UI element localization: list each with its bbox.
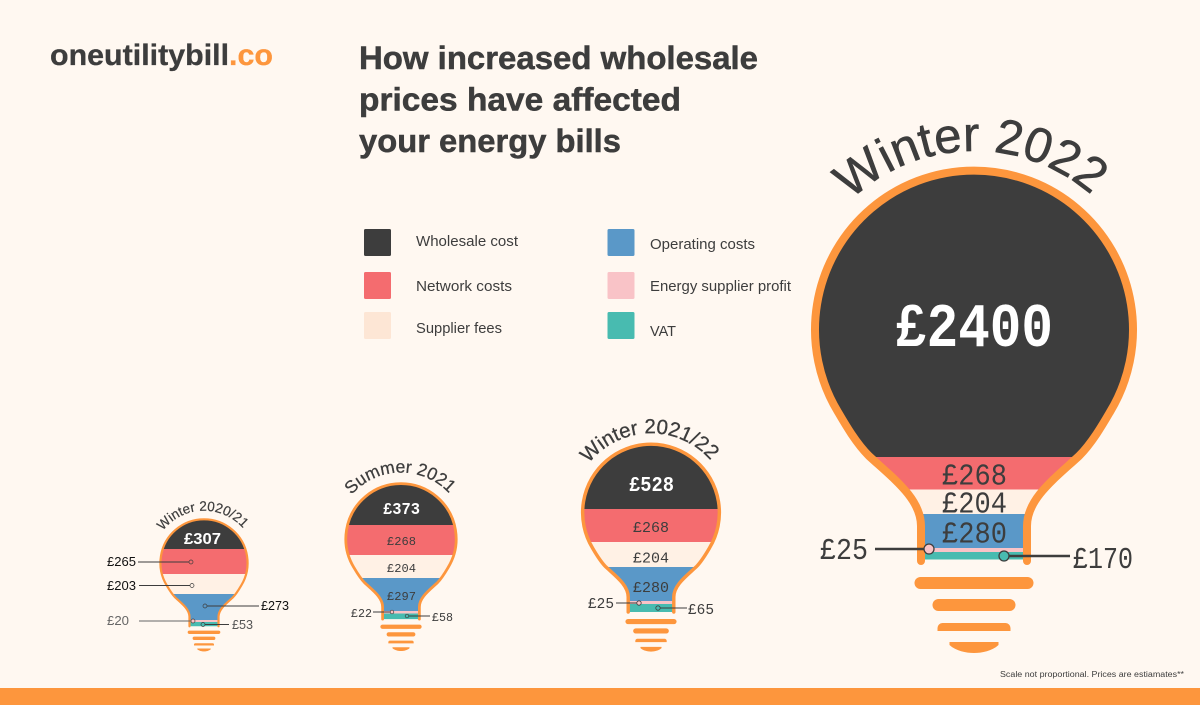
bulb: Winter 2022 — [811, 120, 1137, 653]
bulb segments — [584, 446, 718, 612]
network value: £268 — [387, 535, 416, 549]
legend: operating costs: Operating costs — [650, 237, 755, 253]
operating costs callout — [203, 599, 289, 613]
bulb outline and base — [160, 519, 248, 651]
profit callout: £25 — [588, 596, 614, 613]
supplier fees callout: £203 — [107, 579, 136, 593]
bulb segments — [162, 520, 246, 626]
footnote: Scale not proportional. Prices are estiamates** — [1000, 670, 1184, 679]
VAT callout: £170 — [1073, 543, 1133, 578]
bulb heading: Winter 2022: Winter 2022 — [830, 120, 1107, 194]
legend: supplier fees: Supplier fees — [416, 321, 502, 337]
bulb outline and base — [346, 484, 456, 651]
legend: wholesale cost — [364, 229, 518, 256]
VAT callout — [201, 618, 253, 632]
legend: VAT: VAT — [650, 324, 676, 340]
bulb segments — [347, 485, 455, 620]
bottom bar — [0, 688, 1200, 705]
bulb heading: Winter 2021/22: Winter 2021/22 — [578, 418, 719, 460]
VAT callout — [405, 611, 453, 625]
legend: wholesale cost: Wholesale cost — [416, 234, 518, 250]
supplier fees value: £204 — [387, 562, 416, 576]
legend: network costs — [364, 272, 512, 299]
legend: VAT — [608, 312, 676, 340]
bulb segments — [819, 174, 1129, 560]
VAT callout: £53 — [232, 618, 253, 632]
VAT callout — [999, 543, 1133, 578]
legend: supplier fees — [364, 312, 502, 339]
legend: energy supplier profit — [608, 272, 791, 299]
profit callout — [351, 607, 394, 621]
title: prices have affected — [359, 82, 681, 118]
logo: oneutilitybill.co: oneutilitybill.co — [50, 39, 273, 72]
bulb: Summer 2021 — [344, 463, 458, 651]
legend — [364, 229, 791, 340]
VAT callout: £65 — [688, 602, 714, 619]
profit callout: £25 — [820, 534, 868, 569]
supplier fees value: £204 — [633, 550, 669, 568]
title: your energy bills — [359, 123, 621, 159]
bulb heading: Summer 2021: Summer 2021 — [345, 463, 455, 493]
profit callout: £22 — [351, 607, 372, 621]
VAT callout — [656, 602, 714, 619]
bulb: Winter 2020/21 — [107, 501, 289, 652]
operating costs value: £280 — [942, 518, 1007, 552]
network callout: £265 — [107, 555, 136, 569]
bulb outline and base — [815, 171, 1133, 653]
operating costs callout: £273 — [261, 599, 289, 613]
profit callout — [820, 534, 934, 569]
network value: £268 — [942, 460, 1007, 494]
network callout — [107, 555, 193, 569]
bulb heading: Winter 2020/21: Winter 2020/21 — [156, 501, 248, 529]
wholesale value: £373 — [383, 500, 420, 519]
title: How increased wholesale — [359, 40, 758, 76]
supplier fees value: £204 — [942, 488, 1007, 522]
profit callout: £20 — [107, 614, 129, 628]
profit callout — [107, 614, 195, 628]
operating costs value: £297 — [387, 590, 416, 604]
legend: energy supplier profit: Energy supplier profit — [650, 279, 791, 295]
operating costs value: £280 — [633, 580, 669, 597]
wholesale value: £528 — [629, 475, 674, 498]
network value: £268 — [633, 520, 669, 537]
bulb: Winter 2021/22 — [578, 418, 722, 652]
supplier fees callout — [107, 579, 194, 593]
VAT callout: £58 — [432, 611, 453, 625]
profit callout — [588, 596, 641, 613]
bulb outline and base — [583, 444, 719, 652]
wholesale value: £307 — [184, 531, 221, 548]
legend: operating costs — [608, 229, 755, 256]
wholesale value: £2400 — [895, 294, 1053, 365]
legend: network costs: Network costs — [416, 279, 512, 295]
